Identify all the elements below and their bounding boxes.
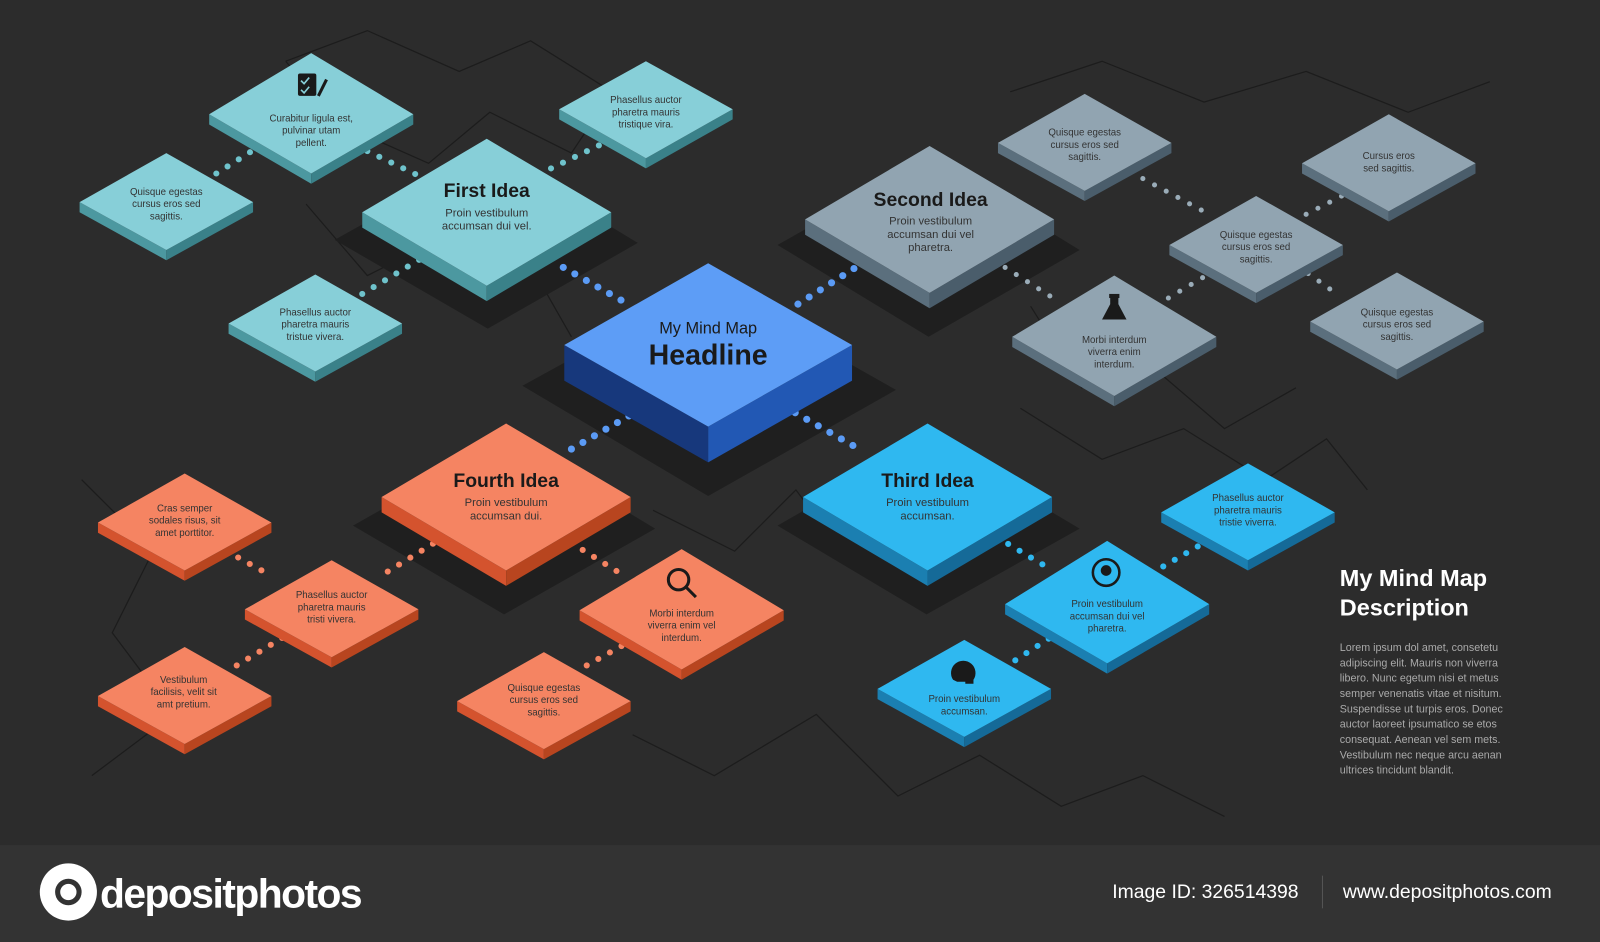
small tiles: teal: tristique vira. [618, 120, 673, 131]
icon: magnifier [668, 569, 696, 597]
small tiles: blue: Proin vestibulum [928, 694, 1000, 705]
tile: First Idea [362, 139, 611, 301]
small tiles: teal [80, 53, 733, 382]
description: Lorem ipsum dol amet, consetetu [1340, 642, 1498, 654]
tile: Second Idea [805, 146, 1054, 308]
small tiles: gray: interdum. [1094, 359, 1134, 370]
small tiles: teal: pharetra mauris [612, 107, 680, 118]
small tiles: teal: pellent. [296, 138, 327, 149]
footer: www.depositphotos.com [1342, 881, 1552, 903]
small tiles: orange: Morbi interdum [649, 608, 714, 619]
small tiles: gray: Quisque egestas [1048, 128, 1121, 139]
description: auctor laoreet ipsumatico se etos [1340, 719, 1497, 731]
tile: Fourth Idea: Fourth Idea [453, 470, 559, 492]
tile: Second Idea: Proin vestibulum [889, 216, 972, 228]
tile: First Idea: First Idea [444, 180, 530, 202]
small tiles: blue: pharetra mauris [1214, 505, 1282, 516]
tile: Third Idea: Proin vestibulum [886, 497, 969, 509]
tile: First Idea: accumsan dui vel. [442, 221, 532, 233]
icon: flask [1102, 294, 1127, 319]
small tiles: blue: accumsan dui vel [1070, 611, 1145, 622]
small tiles: gray: sagittis. [1240, 254, 1273, 265]
small tiles: orange [98, 474, 784, 759]
small tiles: orange: interdum. [661, 633, 702, 644]
small tiles: orange: Quisque egestas [508, 683, 580, 694]
small tiles: teal: sagittis. [150, 211, 183, 222]
icon: checklist [298, 73, 327, 96]
small tiles: teal: pulvinar utam [282, 126, 340, 137]
tile: Fourth Idea: accumsan dui. [470, 510, 542, 522]
small tiles: gray: sagittis. [1068, 152, 1101, 163]
tile: Fourth Idea: Proin vestibulum [465, 497, 548, 509]
small tiles: gray: Quisque egestas [1220, 230, 1293, 241]
small tiles: gray: cursus eros sed [1222, 242, 1290, 253]
tile: Second Idea: pharetra. [908, 242, 953, 254]
small tiles: teal: Quisque egestas [130, 187, 203, 198]
description: adipiscing elit. Mauris non viverra [1340, 657, 1498, 669]
small tiles: gray: Cursus eros [1363, 151, 1415, 162]
icon: head [951, 661, 976, 684]
tile: Fourth Idea [382, 424, 631, 586]
small tiles: blue [878, 463, 1335, 747]
small tiles: blue: tristie viverra. [1219, 518, 1277, 529]
small tiles: gray: sed sagittis. [1363, 163, 1414, 174]
small tiles: gray: Quisque egestas [1361, 307, 1433, 318]
small tiles: teal: pharetra mauris [281, 320, 349, 331]
small tiles: orange: cursus eros sed [510, 695, 578, 706]
tile: First Idea: Proin vestibulum [445, 207, 528, 219]
icon: cycle [1093, 559, 1119, 586]
tile: Second Idea: accumsan dui vel [887, 229, 974, 241]
description: ultrices tincidunt blandit. [1340, 765, 1454, 777]
small tiles: teal: cursus eros sed [132, 199, 201, 210]
small tiles: orange: pharetra mauris [298, 602, 366, 613]
tile: Third Idea: Third Idea [881, 470, 974, 492]
connectors: dotted lines [216, 145, 1342, 665]
small tiles: orange: Cras semper [157, 503, 213, 514]
tile: headline: My Mind Map [659, 320, 757, 338]
tile: Second Idea: Second Idea [874, 189, 988, 211]
small tiles: orange: viverra enim vel [648, 621, 716, 632]
description: consequat. Aenean vel sem mets. [1340, 734, 1500, 746]
small tiles: gray: cursus eros sed [1363, 320, 1431, 331]
small tiles: teal: tristue vivera. [287, 332, 344, 343]
small tiles: gray [998, 94, 1484, 406]
description: libero. Nunc egetum nisi et metus [1340, 673, 1499, 685]
small tiles: teal: Phasellus auctor [279, 307, 352, 318]
description: Description [1340, 594, 1469, 620]
small tiles: orange: tristi vivera. [307, 615, 356, 626]
footer: Image ID: 326514398 [1112, 881, 1299, 903]
description: Suspendisse ut turpis eros. Donec [1340, 703, 1503, 715]
small tiles: orange: sagittis. [527, 707, 560, 718]
tile: headline: Headline [649, 339, 768, 371]
description [1340, 565, 1503, 777]
tile: Third Idea: accumsan. [900, 510, 955, 522]
small tiles: gray: sagittis. [1381, 332, 1413, 343]
small tiles: orange: Phasellus auctor [296, 590, 368, 601]
small tiles: blue: Proin vestibulum [1071, 599, 1143, 610]
small tiles: orange: sodales risus, sit [149, 516, 221, 527]
small tiles: orange: Vestibulum [160, 675, 207, 686]
description: semper venenatis vitae et nisitum. [1340, 688, 1502, 700]
small tiles: blue: Phasellus auctor [1212, 493, 1285, 504]
small tiles: orange: amet porttitor. [155, 528, 214, 539]
small tiles: gray: Morbi interdum [1082, 335, 1147, 346]
small tiles: blue: accumsan. [941, 706, 988, 717]
small tiles: gray: viverra enim [1088, 347, 1141, 358]
small tiles: blue: pharetra. [1088, 624, 1127, 635]
small tiles: orange: amt pretium. [157, 699, 211, 710]
description: Vestibulum nec neque arcu aenan [1340, 749, 1502, 761]
description: My Mind Map [1340, 565, 1487, 591]
tile: headline [564, 263, 852, 462]
shadows [335, 153, 1080, 614]
footer [0, 845, 1600, 942]
small tiles: teal: Curabitur ligula est, [269, 113, 353, 124]
small tiles: teal: Phasellus auctor [610, 95, 682, 106]
footer: depositphotos [100, 870, 362, 916]
small tiles: orange: facilisis, velit sit [151, 687, 217, 698]
tile: Third Idea [803, 424, 1052, 586]
small tiles: gray: cursus eros sed [1051, 140, 1119, 151]
